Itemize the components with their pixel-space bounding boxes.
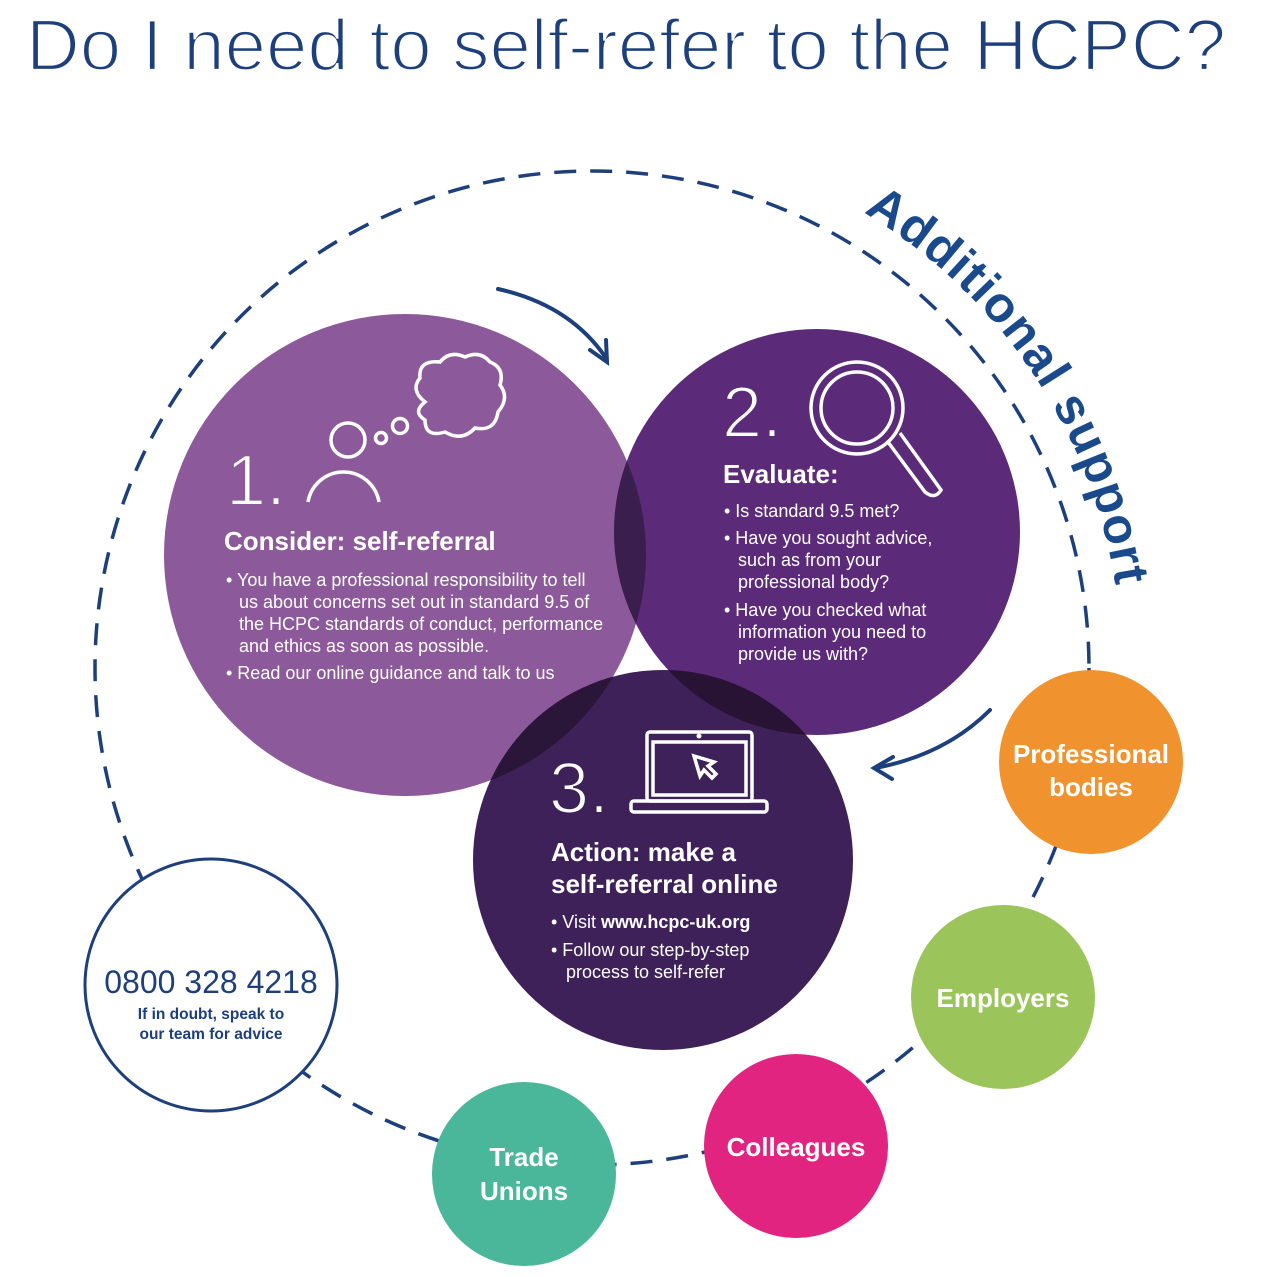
icon: person thinking	[308, 354, 505, 502]
panel: step 2 text: professional body?	[738, 572, 889, 592]
support: Trade Unions	[432, 1082, 616, 1266]
panel: step 3 text: 3.	[549, 749, 609, 829]
callout: phone number: 0800 328 4218	[104, 964, 318, 1000]
panel: step 3 text: • Visit www.hcpc-uk.org	[551, 912, 750, 932]
panel: step 2 text	[722, 362, 941, 664]
dashed support ring	[95, 171, 1089, 1165]
panel: step 2 text: such as from your	[738, 550, 881, 570]
panel: step 2 text: information you need to	[738, 622, 926, 642]
curved heading: Additional support: Additional support	[864, 190, 1147, 585]
support: Employers	[911, 905, 1095, 1089]
support: Colleagues: Colleagues	[727, 1132, 865, 1162]
panel: step 1 text	[224, 354, 603, 683]
panel: step 2 text: • Have you checked what	[724, 600, 926, 620]
support: Trade Unions: Unions	[480, 1176, 568, 1206]
arrow: step 2 to 3	[874, 710, 990, 779]
panel: step 3 text: process to self-refer	[566, 962, 725, 982]
callout: phone number	[85, 859, 337, 1111]
support: Professional bodies: bodies	[1049, 772, 1133, 802]
panel: step 1 text: the HCPC standards of conduct, performance	[239, 614, 603, 634]
panel: step 1 text: us about concerns set out in standard 9.5 of	[239, 592, 590, 612]
support: Professional bodies	[999, 670, 1183, 854]
panel: step 3 text: Action: make a	[551, 837, 736, 867]
panel: step 2 text: provide us with?	[738, 644, 868, 664]
panel: step 1 text: 1.	[226, 441, 286, 521]
panel: step 3 text	[549, 732, 778, 982]
support: Trade Unions: Trade	[489, 1142, 559, 1172]
icon: laptop	[631, 732, 767, 812]
callout: phone number: If in doubt, speak to	[138, 1006, 284, 1023]
arrow: step 1 to 2	[498, 289, 607, 362]
panel: step 1 text: Consider: self-referral	[224, 526, 496, 556]
panel: step 3 text: • Follow our step-by-step	[551, 940, 749, 960]
support: Colleagues	[704, 1054, 888, 1238]
panel: step 1 text: and ethics as soon as possible.	[239, 636, 489, 656]
panel: step 2 text: 2.	[722, 373, 782, 453]
panel: step 2 text: • Is standard 9.5 met?	[724, 501, 899, 521]
support: Employers: Employers	[937, 983, 1069, 1013]
callout: phone number: our team for advice	[140, 1026, 283, 1043]
panel: step 2 text: Evaluate:	[723, 459, 839, 489]
panel: step 3 text: self-referral online	[551, 869, 778, 899]
title: Do I need to self-refer to the HCPC?	[26, 6, 1226, 86]
support: Professional bodies: Professional	[1013, 739, 1169, 769]
panel: step circles	[164, 314, 1020, 1050]
icon: magnifying glass	[811, 362, 941, 496]
panel: step 2 text: • Have you sought advice,	[724, 528, 932, 548]
panel: step 1 text: • Read our online guidance and talk to us	[226, 663, 555, 683]
panel: step 1 text: • You have a professional responsibility to tell	[226, 570, 586, 590]
